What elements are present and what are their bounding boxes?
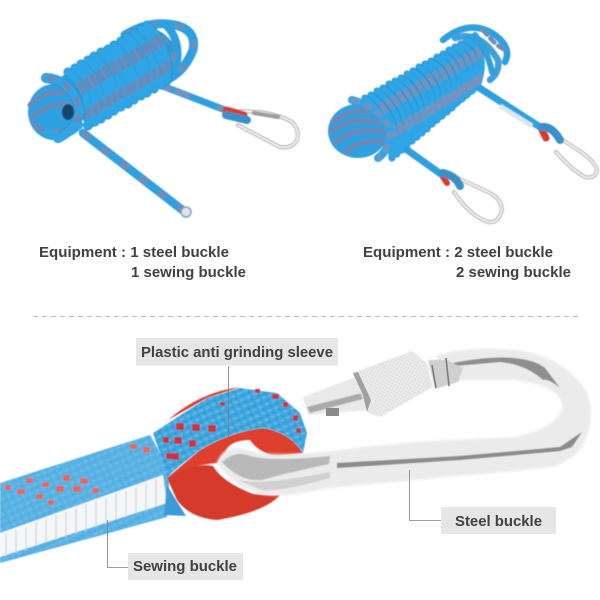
steel carabiner <box>217 349 591 495</box>
back of red sleeve <box>168 387 240 420</box>
lower carabiner <box>454 178 502 222</box>
gate shaft <box>303 377 372 415</box>
callout: sewing buckle <box>108 520 243 580</box>
photo: close-up of rope and carabiner <box>0 349 591 563</box>
red weave marks <box>163 389 301 460</box>
caption: equipment left <box>39 244 246 281</box>
coil wraps <box>360 38 481 160</box>
interior of red sleeve <box>167 428 303 478</box>
rope and lower sleeve <box>0 387 303 563</box>
faded red marks <box>5 444 150 505</box>
callout: steel buckle: Steel buckle <box>455 513 542 530</box>
near end coil <box>328 100 390 158</box>
coil wraps <box>62 22 172 130</box>
far end loops <box>125 24 194 78</box>
caption: equipment right: Equipment : 2 steel buckle <box>363 244 553 261</box>
upper carabiner <box>555 135 597 177</box>
white stitching <box>0 475 167 557</box>
rope stub under sleeve <box>164 485 186 516</box>
rope lead and sleeve <box>160 85 247 120</box>
callout: plastic anti grinding sleeve <box>136 338 338 440</box>
rope leads and sleeves <box>403 87 560 186</box>
knurled sleeve <box>353 351 433 417</box>
caption: equipment left: Equipment : 1 steel buckle <box>39 244 229 261</box>
far end loops <box>443 28 507 80</box>
caption: equipment right: 2 sewing buckle <box>456 264 571 281</box>
carabiner small <box>238 111 298 147</box>
callout: plastic anti grinding sleeve: Plastic anti grinding sleeve <box>141 344 333 361</box>
thread collar <box>428 360 463 389</box>
caption: equipment left: 1 sewing buckle <box>131 264 246 281</box>
caption: equipment right <box>363 244 571 281</box>
callout: steel buckle <box>410 470 556 534</box>
carabiner body <box>217 349 591 495</box>
near end coil <box>28 78 80 140</box>
bent rope over sleeve <box>153 388 307 477</box>
hook shading <box>222 358 582 490</box>
tail end of rope <box>83 133 191 217</box>
photo: rope with two steel buckles <box>328 28 597 222</box>
callout: sewing buckle: Sewing buckle <box>133 558 237 575</box>
photo: rope with one steel buckle <box>28 22 298 217</box>
straight rope section <box>0 435 170 563</box>
lower red sleeve <box>167 465 280 520</box>
